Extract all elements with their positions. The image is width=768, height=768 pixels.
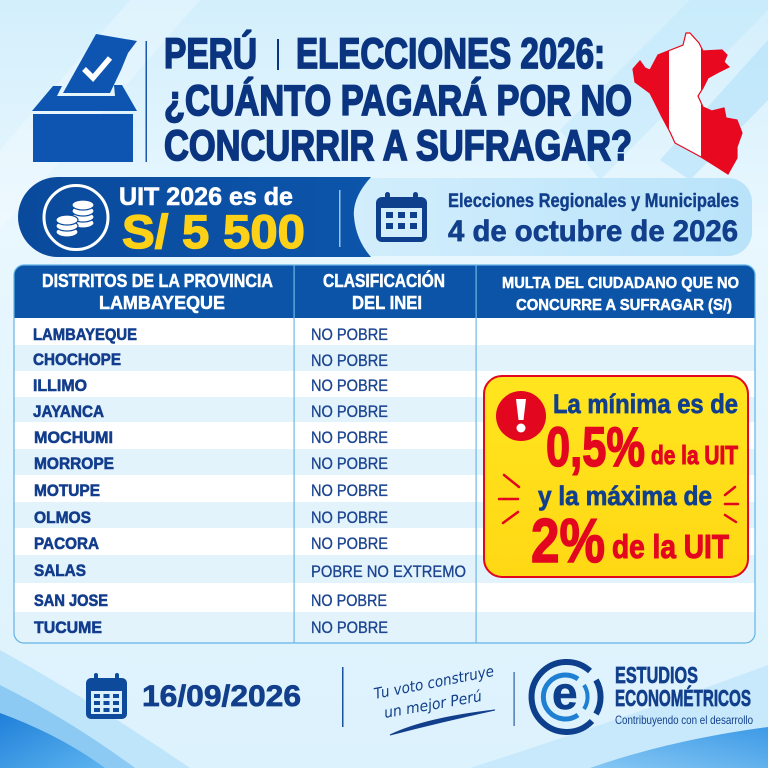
- emphasis rays: [499, 475, 738, 523]
- title: [164, 29, 632, 170]
- maximum text: y la máxima de: [538, 481, 712, 511]
- footer date: [86, 673, 301, 719]
- column heading: classification: [323, 270, 445, 313]
- slogan: [372, 662, 496, 735]
- minimum text: [546, 389, 738, 478]
- INEI classifications: NO POBRE: [311, 376, 388, 395]
- district names: OLMOS: [34, 508, 91, 527]
- logo: Estudios Econométricos: e: [552, 667, 578, 719]
- column heading: classification: DEL INEI: [352, 293, 422, 313]
- INEI classifications: NO POBRE: [311, 402, 388, 421]
- minimum text: La mínima es de: [553, 389, 738, 419]
- election date: 4 de octubre de 2026: [448, 215, 738, 248]
- UIT amount: S/ 5 500: [122, 205, 305, 258]
- column heading: classification: CLASIFICACIÓN: [323, 270, 445, 291]
- header divider: [146, 41, 147, 162]
- district names: TUCUME: [34, 618, 102, 637]
- INEI classifications: NO POBRE: [311, 351, 388, 370]
- column heading: districts: DISTRITOS DE LA PROVINCIA: [42, 271, 273, 291]
- title: ELECCIONES 2026:: [296, 30, 605, 78]
- INEI classifications: NO POBRE: [311, 481, 388, 500]
- district names: MOCHUMI: [34, 428, 113, 447]
- logo: Estudios Econométricos: [532, 662, 753, 732]
- date text: 16/09/2026: [142, 680, 301, 713]
- icon: ballot box: [32, 34, 137, 162]
- district names: [33, 325, 137, 637]
- title: ¿CUÁNTO PAGARÁ POR NO: [164, 77, 632, 125]
- icon: exclamation: [496, 391, 546, 441]
- title: PERÚ: [164, 29, 257, 78]
- column heading: districts: [42, 271, 273, 313]
- callout: fine range: [484, 376, 748, 577]
- title: CONCURRIR A SUFRAGAR?: [164, 122, 632, 170]
- district names: ILLIMO: [33, 376, 87, 395]
- INEI classifications: POBRE NO EXTREMO: [311, 562, 466, 581]
- INEI classifications: [311, 325, 466, 637]
- company name: ESTUDIOS: [615, 662, 698, 688]
- district names: LAMBAYEQUE: [33, 325, 137, 344]
- minimum text: 0,5%: [546, 415, 645, 478]
- district names: SAN JOSE: [34, 591, 108, 610]
- icon: coins: [44, 186, 108, 250]
- INEI classifications: NO POBRE: [311, 428, 388, 447]
- INEI classifications: NO POBRE: [311, 454, 388, 473]
- maximum text: [531, 481, 729, 576]
- column heading: districts: LAMBAYEQUE: [99, 293, 225, 313]
- district names: PACORA: [34, 534, 99, 553]
- district names: JAYANCA: [33, 402, 104, 421]
- INEI classifications: NO POBRE: [311, 534, 388, 553]
- minimum text: de la UIT: [651, 440, 738, 470]
- district names: MORROPE: [34, 454, 114, 473]
- icon: map of Peru flag: [632, 32, 743, 175]
- panel: UIT value band: [18, 177, 371, 258]
- district names: SALAS: [34, 561, 86, 580]
- maximum text: 2%: [531, 507, 605, 576]
- icon: calendar: [86, 673, 127, 719]
- INEI classifications: NO POBRE: [311, 591, 387, 610]
- district names: CHOCHOPE: [33, 350, 121, 369]
- maximum text: de la UIT: [612, 528, 729, 565]
- INEI classifications: NO POBRE: [311, 618, 388, 637]
- INEI classifications: NO POBRE: [311, 325, 388, 344]
- panel: election date band: [340, 178, 752, 256]
- slogan: Tu voto construye: [372, 662, 496, 703]
- table: [14, 265, 755, 643]
- INEI classifications: NO POBRE: [311, 508, 388, 527]
- column heading: fine: CONCURRE A SUFRAGAR (S/): [516, 297, 732, 314]
- district names: MOTUPE: [34, 481, 100, 500]
- column heading: fine: [502, 275, 739, 314]
- slogan: un mejor Perú: [383, 687, 483, 722]
- icon: calendar: [376, 192, 427, 242]
- column heading: fine: MULTA DEL CIUDADANO QUE NO: [502, 275, 739, 292]
- UIT label: UIT 2026 es de: [119, 183, 293, 211]
